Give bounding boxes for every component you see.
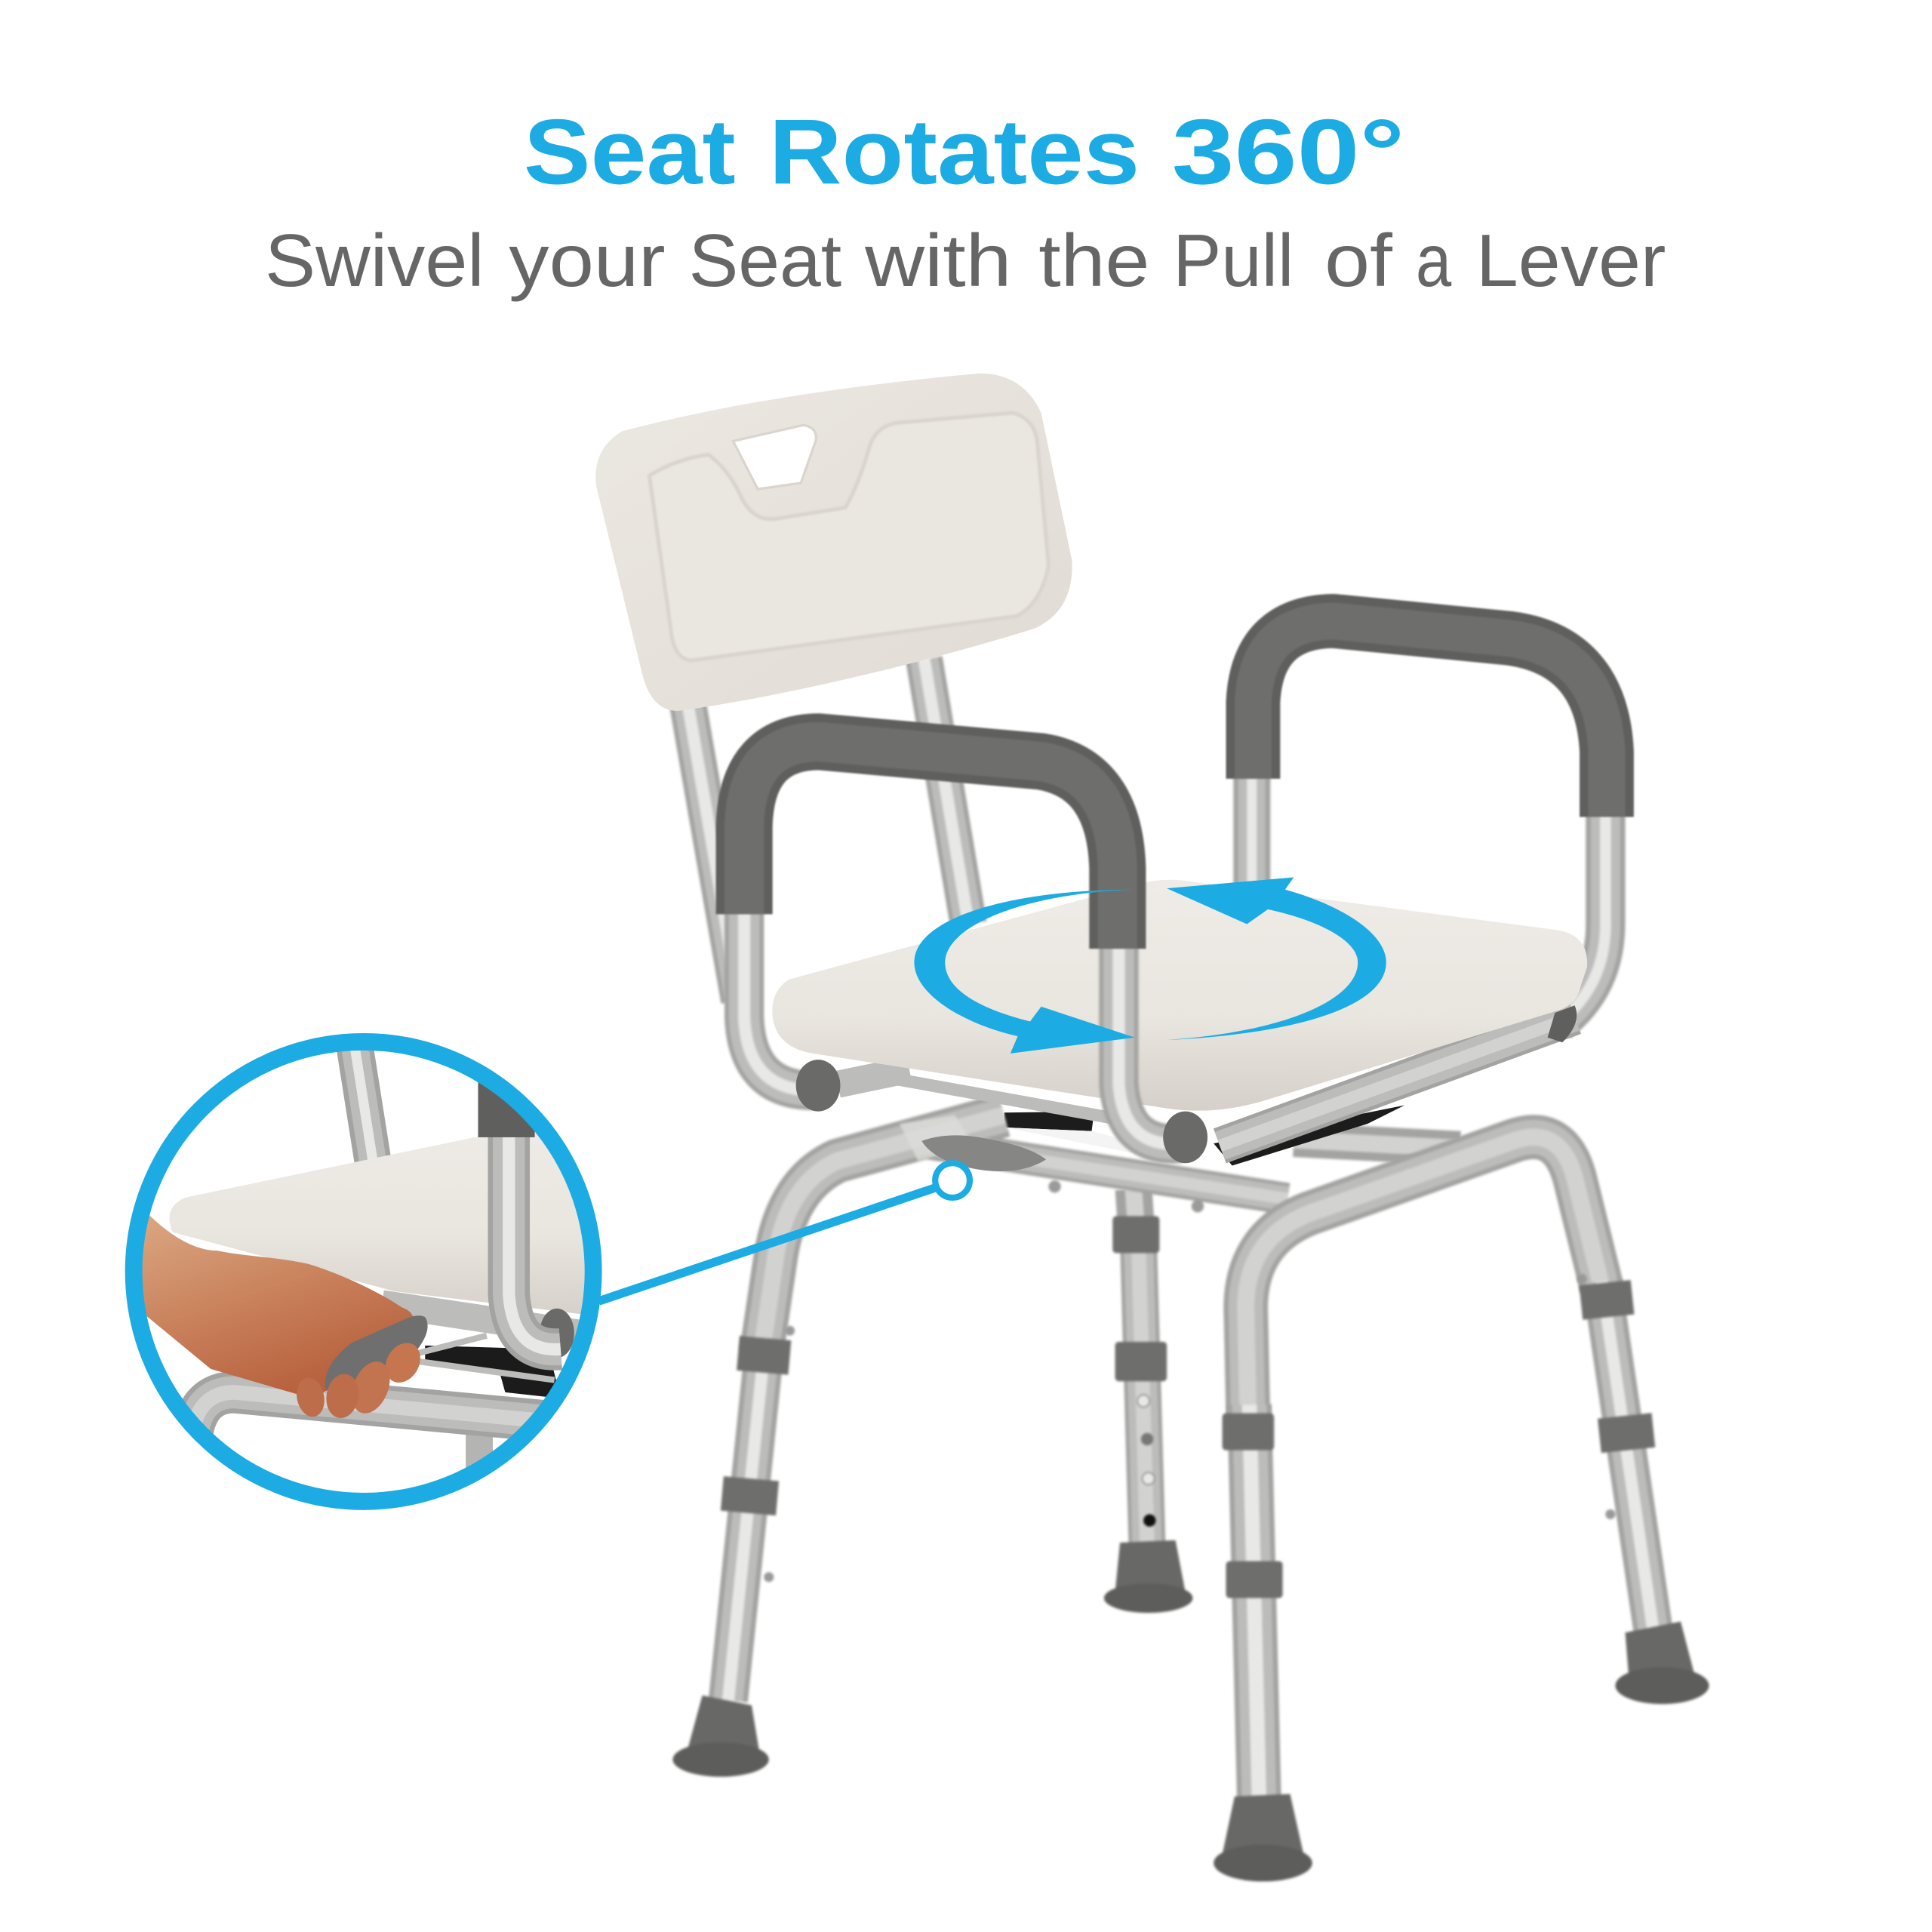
subtitle: the (1038, 219, 1149, 302)
swivel plate (1004, 1105, 1404, 1165)
rear arm (1252, 777, 1605, 1023)
rear arm pad (1253, 621, 1607, 817)
lower frame (761, 1115, 1601, 1417)
right leg (1577, 1274, 1709, 1704)
back legs and base rails (1104, 1140, 1460, 1613)
backrest (595, 374, 1072, 711)
front leg (1214, 1404, 1312, 1881)
subtitle: of (1324, 219, 1393, 302)
front arm pad (744, 742, 1118, 949)
title: Seat (524, 100, 736, 203)
pull lever (921, 1135, 1046, 1171)
title: Rotates (769, 100, 1140, 203)
inset ring (134, 1041, 593, 1501)
subtitle (265, 219, 1666, 302)
rotation arrow: clockwise from seat right (1167, 877, 1386, 1040)
front arm (744, 912, 1180, 1144)
callout connector line (598, 1186, 939, 1301)
subtitle: a (1416, 219, 1452, 302)
back posts (688, 659, 968, 1001)
subtitle: Lever (1476, 219, 1666, 302)
seat (772, 880, 1587, 1146)
subtitle: Swivel (265, 219, 485, 302)
subtitle: Seat (689, 219, 841, 302)
inset: hand pulling lever (129, 1041, 616, 1501)
rotation arrow: around seat left (914, 890, 1135, 1054)
inset photo contents (142, 1051, 585, 1468)
title (524, 100, 1404, 203)
left leg (672, 1326, 795, 1777)
lever marker circle (935, 1163, 970, 1198)
arm end caps (796, 1060, 1208, 1163)
subtitle: Pull (1173, 219, 1294, 302)
subtitle: your (509, 219, 666, 302)
shower chair (595, 374, 1709, 1881)
title: 360° (1172, 100, 1404, 203)
subtitle: with (864, 219, 1011, 302)
